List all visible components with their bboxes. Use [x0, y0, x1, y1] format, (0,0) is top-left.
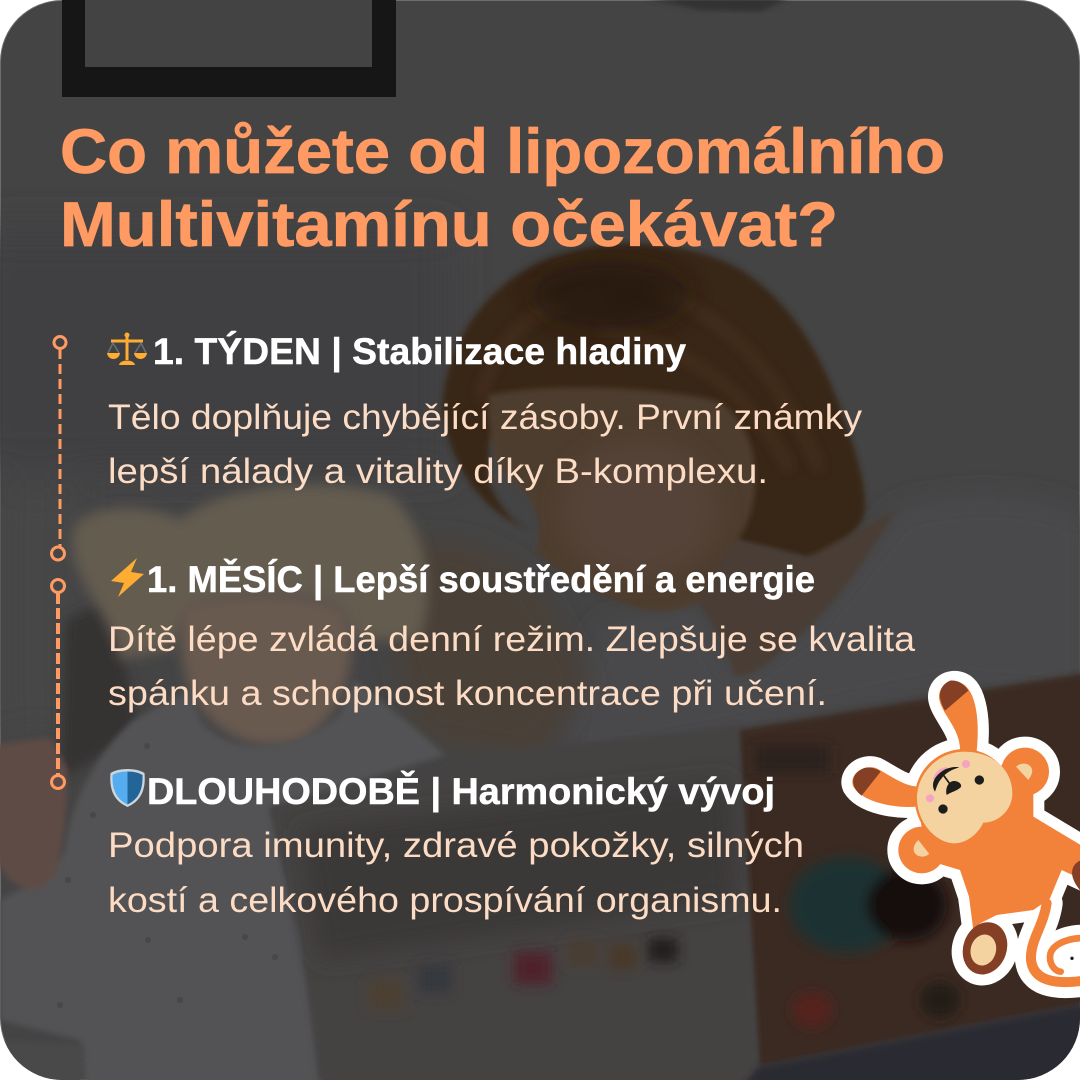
icon: lightning — [111, 558, 144, 597]
child hand — [0, 738, 68, 889]
picture frame — [62, 0, 396, 97]
section: dlouhodobě — [108, 769, 804, 920]
sticker white outline — [852, 682, 1080, 982]
heading: 1. TÝDEN | Stabilizace hladiny — [153, 331, 686, 373]
body text: Podpora imunity, zdravé pokožky, silných — [108, 826, 804, 865]
tail curl dot — [1070, 957, 1074, 960]
hair dark crown — [530, 260, 690, 330]
wall shading — [0, 212, 1, 741]
body text — [108, 826, 804, 920]
mother neck — [697, 509, 897, 676]
limbs and body — [852, 682, 1080, 930]
wall object — [645, 0, 790, 12]
mother shirt — [1079, 504, 1080, 676]
body text: spánku a schopnost koncentrace při učení. — [108, 674, 827, 713]
sofa right of child — [397, 542, 587, 750]
book page shade — [310, 788, 728, 952]
child dress — [0, 680, 445, 1080]
icon: scales — [107, 332, 147, 365]
body text — [108, 620, 916, 713]
mother hair — [442, 244, 865, 558]
face skin warmth — [568, 448, 712, 572]
timeline — [52, 336, 66, 788]
hair highlights — [481, 309, 818, 463]
child hair — [72, 485, 428, 660]
title — [60, 117, 945, 260]
tan parts — [914, 752, 1032, 968]
mascot: orange monkey sticker — [852, 680, 1080, 982]
face — [926, 760, 984, 814]
book bottom edge — [740, 1003, 1080, 1080]
body text: kostí a celkového prospívání organismu. — [108, 881, 782, 920]
icon: shield — [110, 769, 145, 807]
tail — [1031, 903, 1080, 982]
carpet — [0, 1040, 85, 1080]
section: 1. týden — [107, 331, 863, 491]
dark gap behind child — [60, 600, 140, 780]
body text: lepší nálady a vitality díky B-komplexu. — [108, 452, 768, 491]
child face — [180, 594, 351, 745]
book illustration — [368, 745, 960, 1028]
heading: DLOUHODOBĚ | Harmonický vývoj — [147, 770, 775, 813]
book page — [270, 725, 760, 1080]
dress hearts — [57, 743, 278, 1008]
heading: 1. MĚSÍC | Lepší soustředění a energie — [147, 558, 815, 601]
title: Co můžete od lipozomálního — [60, 117, 945, 187]
brown tips — [853, 680, 1080, 981]
section: 1. měsíc — [108, 558, 916, 713]
body text — [108, 398, 863, 491]
title: Multivitamínu očekávat? — [60, 190, 838, 260]
body text: Tělo doplňuje chybějící zásoby. První známky — [108, 398, 863, 437]
body text: Dítě lépe zvládá denní režim. Zlepšuje se kvalita — [108, 620, 916, 659]
book cover — [738, 672, 1080, 1067]
mother face — [488, 387, 760, 612]
